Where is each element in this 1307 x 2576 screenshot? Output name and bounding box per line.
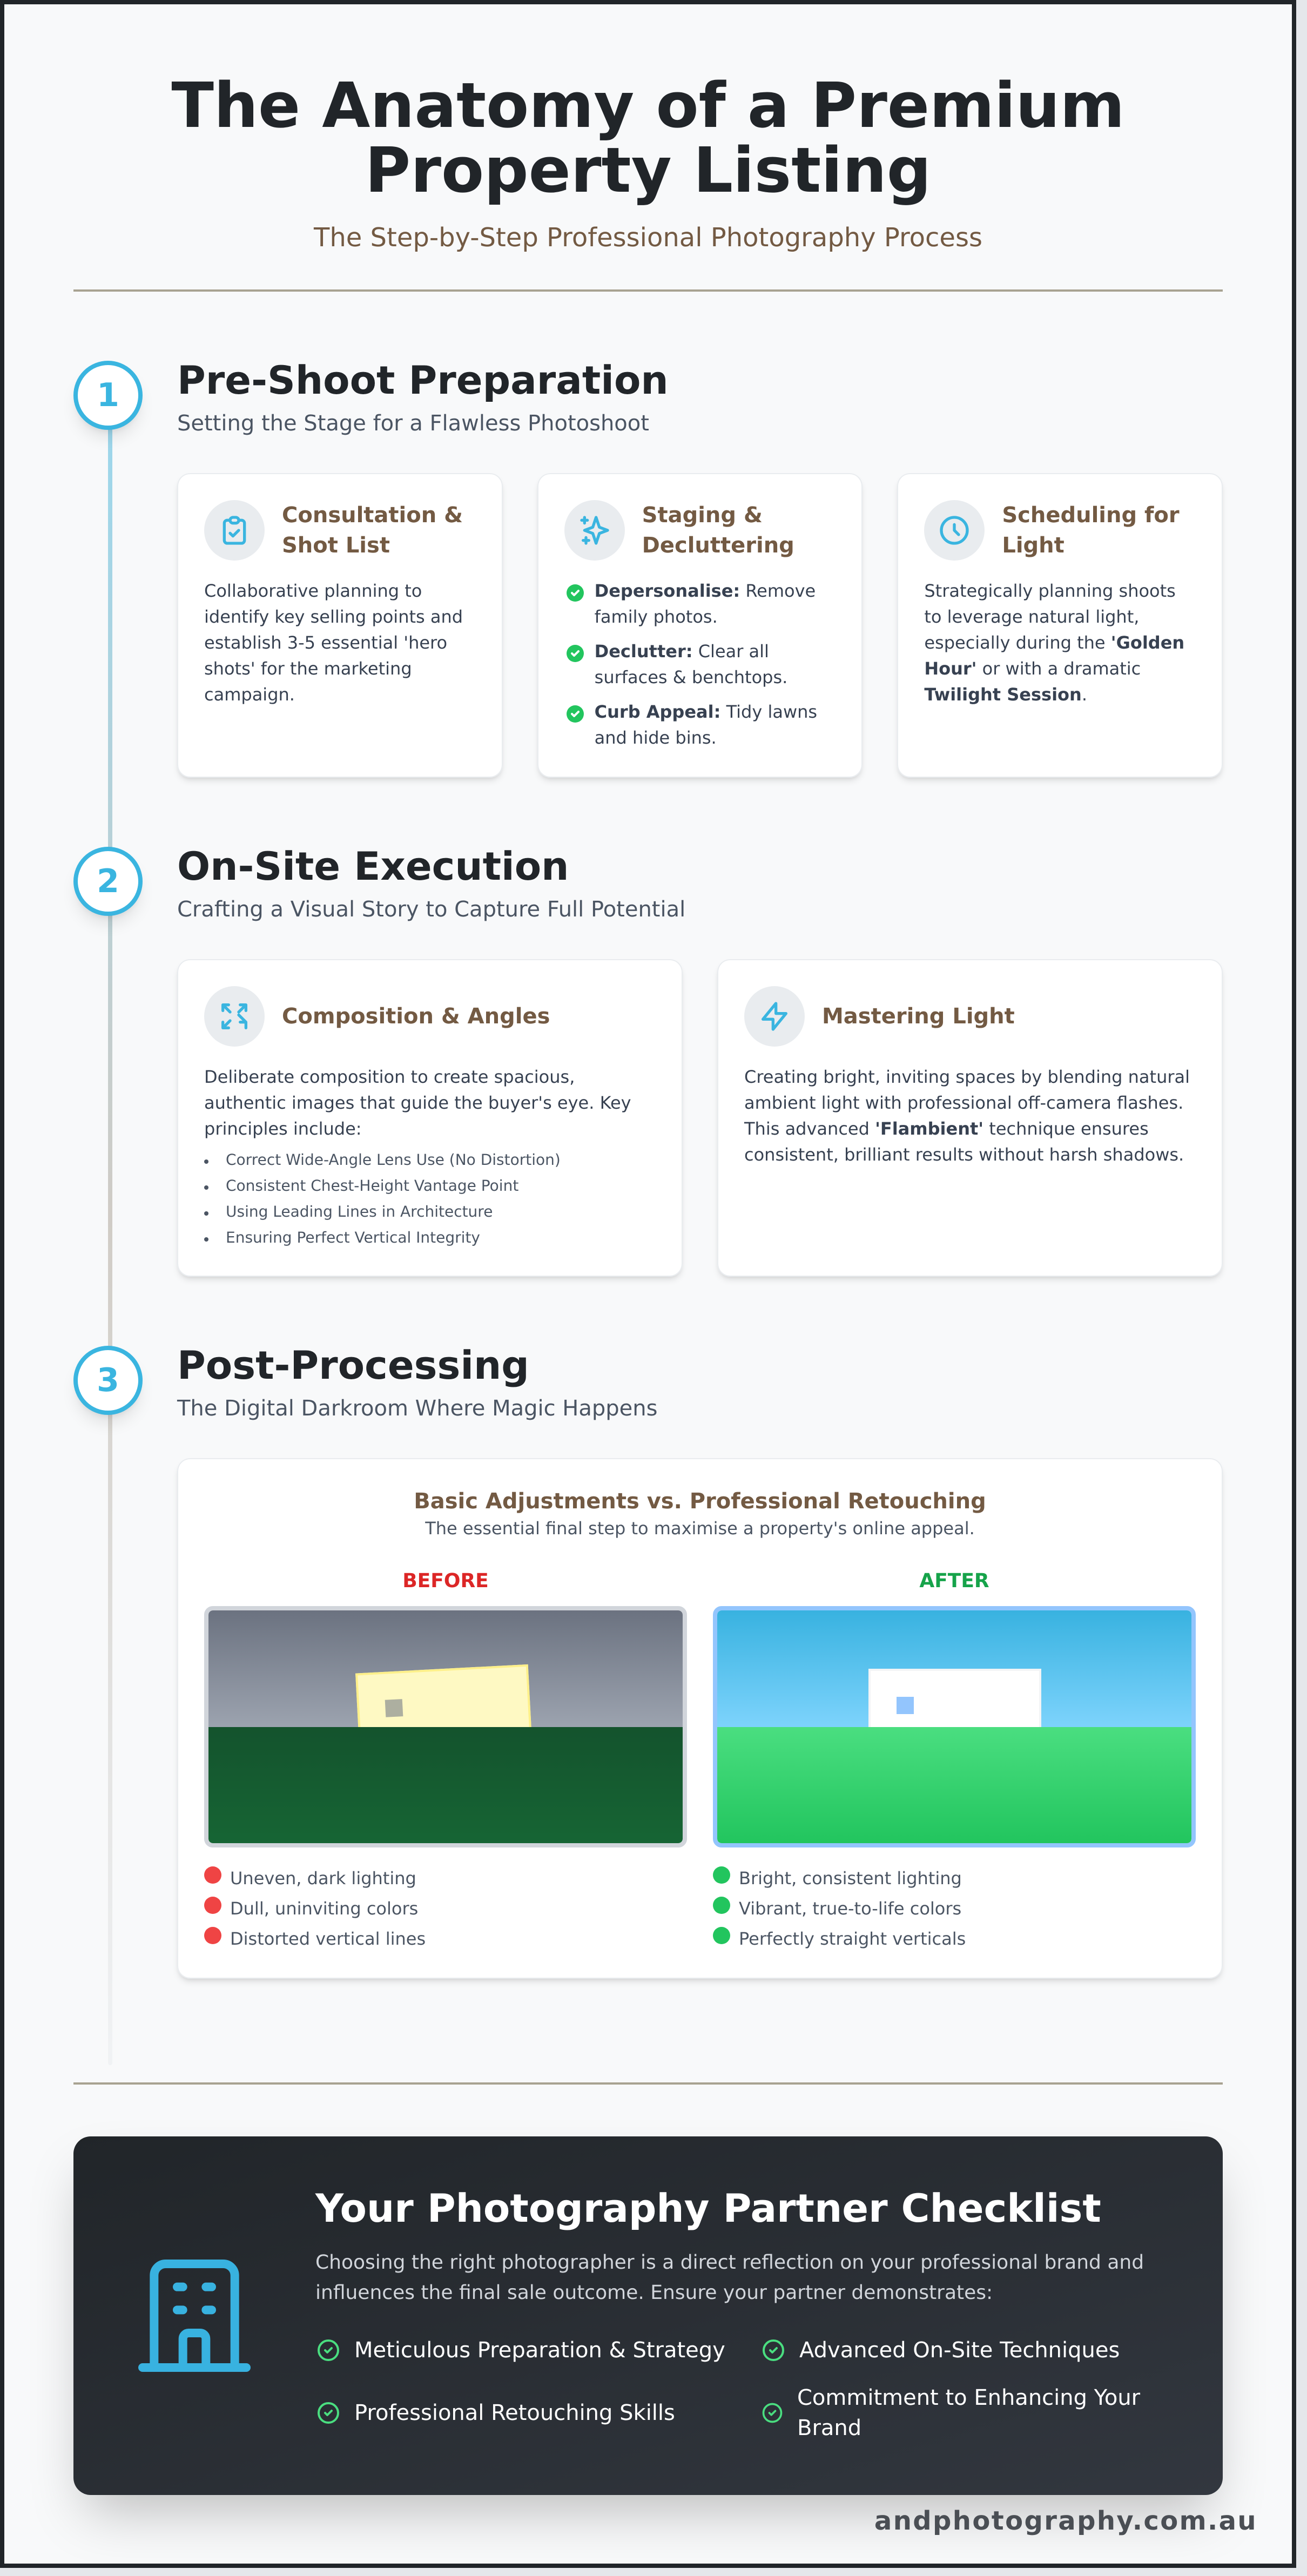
card title: Mastering Light bbox=[822, 1004, 1015, 1029]
list item: Declutter: surfaces & benchtops. bbox=[595, 667, 787, 687]
comparison title: Basic Adjustments vs. Professional Retouching bbox=[414, 1489, 986, 1514]
card title bbox=[1002, 503, 1180, 558]
card title: Shot List bbox=[282, 533, 390, 558]
list item: Declutter bbox=[595, 641, 787, 687]
after list: Perfectly straight verticals bbox=[739, 1928, 966, 1949]
checklist intro: Choosing the right photographer is a direct reflection on your professional brand and bbox=[315, 2251, 1144, 2274]
bullet list of principles: Using Leading Lines in Architecture bbox=[226, 1203, 493, 1220]
title bbox=[171, 70, 1125, 207]
card title: Scheduling for bbox=[1002, 503, 1180, 528]
card text bbox=[744, 1067, 1190, 1165]
card title: Composition & Angles bbox=[282, 1004, 550, 1029]
before list: Uneven, dark lighting bbox=[230, 1868, 416, 1889]
before label: BEFORE bbox=[402, 1570, 489, 1592]
card text: Twilight Session. bbox=[924, 684, 1087, 705]
card text: consistent, brilliant results without harsh shadows. bbox=[744, 1144, 1184, 1165]
icon: lightning bolt bbox=[744, 986, 805, 1047]
after list: Vibrant, true-to-life colors bbox=[739, 1898, 961, 1919]
after label: AFTER bbox=[919, 1570, 989, 1592]
list item: Declutter: Declutter: Clear all bbox=[595, 641, 769, 662]
list item: Curb Appeal: Curb Appeal: Tidy lawns bbox=[595, 702, 817, 722]
icon: sparkles bbox=[564, 500, 625, 561]
card title: Decluttering bbox=[642, 533, 794, 558]
checklist intro bbox=[315, 2251, 1144, 2304]
card title bbox=[282, 503, 463, 558]
card text: Collaborative planning to bbox=[204, 581, 422, 601]
card text: establish 3-5 essential 'hero bbox=[204, 632, 447, 653]
card text: ambient light with professional off-camera flashes. bbox=[744, 1093, 1183, 1113]
checklist item 4: Commitment to Enhancing Your bbox=[797, 2385, 1140, 2410]
check icon 2 bbox=[567, 645, 584, 662]
before image illustration bbox=[204, 1606, 687, 1847]
panel: Mastering Light bbox=[717, 959, 1223, 1277]
panel: Scheduling for Light bbox=[897, 473, 1223, 778]
bullet list of principles: Correct Wide-Angle Lens Use (No Distortion) bbox=[226, 1151, 561, 1169]
step number 3 bbox=[73, 1346, 143, 1415]
card text bbox=[204, 581, 463, 705]
icon: clipboard check bbox=[204, 500, 265, 561]
bullet list of principles: Ensuring Perfect Vertical Integrity bbox=[226, 1229, 480, 1246]
card text bbox=[204, 1067, 631, 1139]
before list bbox=[204, 1866, 426, 1949]
card title bbox=[642, 503, 794, 558]
title: The Anatomy of a Premium bbox=[171, 70, 1125, 142]
card text: Strategically planning shoots bbox=[924, 581, 1176, 601]
step number 2 bbox=[73, 847, 143, 916]
list item: Depersonalise: family photos. bbox=[595, 606, 718, 627]
panel: Consultation & Shot List bbox=[177, 473, 503, 778]
list item: Curb Appeal bbox=[595, 702, 817, 748]
checklist intro: influences the final sale outcome. Ensure your partner demonstrates: bbox=[315, 2282, 993, 2304]
panel: Composition & Angles bbox=[177, 959, 683, 1277]
lower divider bbox=[73, 2082, 1223, 2085]
bullet list of principles: Consistent Chest-Height Vantage Point bbox=[226, 1177, 518, 1195]
list item: Depersonalise: Depersonalise: Remove bbox=[595, 581, 816, 601]
section subheading 2: Crafting a Visual Story to Capture Full Potential bbox=[177, 897, 685, 922]
checklist item 1: Meticulous Preparation & Strategy bbox=[354, 2338, 725, 2363]
section heading: Post-Processing: Post-Processing bbox=[177, 1343, 529, 1388]
section heading: Pre-Shoot Preparation: Pre-Shoot Preparation bbox=[177, 358, 669, 403]
section subheading 3: The Digital Darkroom Where Magic Happens bbox=[177, 1396, 657, 1421]
before list: Distorted vertical lines bbox=[230, 1928, 426, 1949]
step number 3: 3 bbox=[97, 1361, 119, 1399]
checklist item 2: Advanced On-Site Techniques bbox=[799, 2338, 1120, 2363]
panel: Your Photography Partner Checklist bbox=[73, 2136, 1223, 2495]
section heading: On-Site Execution: On-Site Execution bbox=[177, 844, 569, 889]
panel: before and after comparison bbox=[177, 1458, 1223, 1979]
card text: identify key selling points and bbox=[204, 606, 463, 627]
checklist item 3: Professional Retouching Skills bbox=[354, 2400, 675, 2425]
after image illustration bbox=[713, 1606, 1196, 1847]
website footer: andphotography.com.au bbox=[874, 2506, 1257, 2536]
card text: shots' for the marketing bbox=[204, 658, 412, 679]
step number 1 bbox=[73, 361, 143, 430]
checklist item 4 bbox=[760, 2383, 1182, 2443]
card text: campaign. bbox=[204, 684, 295, 705]
section subheading 1: Setting the Stage for a Flawless Photoshoot bbox=[177, 411, 649, 436]
timeline line bbox=[108, 363, 112, 2065]
bullet list of principles bbox=[204, 1151, 561, 1246]
header divider bbox=[73, 289, 1223, 292]
card text: Creating bright, inviting spaces by blending natural bbox=[744, 1067, 1190, 1087]
card text: especially during the 'Golden bbox=[924, 632, 1184, 653]
card title: Staging & bbox=[642, 503, 763, 528]
icon: clock bbox=[924, 500, 985, 561]
card text: authentic images that guide the buyer's eye. Key bbox=[204, 1093, 631, 1113]
list item: Depersonalise bbox=[595, 581, 816, 627]
card title: Consultation & bbox=[282, 503, 463, 528]
title: Property Listing bbox=[365, 134, 931, 207]
card text bbox=[924, 581, 1184, 705]
subtitle: The Step-by-Step Professional Photography Process bbox=[314, 222, 982, 253]
step number 2: 2 bbox=[97, 862, 119, 900]
card text: Deliberate composition to create spacious, bbox=[204, 1067, 575, 1087]
check icon 3 bbox=[567, 705, 584, 723]
card text: This advanced 'Flambient' technique ensures bbox=[744, 1118, 1149, 1139]
icon: expanding arrows bbox=[204, 986, 265, 1047]
card text: to leverage natural light, bbox=[924, 606, 1139, 627]
checklist item 4: Brand bbox=[797, 2416, 861, 2440]
panel: Staging & Decluttering bbox=[537, 473, 863, 778]
card title: Light bbox=[1002, 533, 1065, 558]
check icon 1 bbox=[567, 584, 584, 602]
checklist heading: Your Photography Partner Checklist bbox=[315, 2186, 1101, 2231]
before list: Dull, uninviting colors bbox=[230, 1898, 418, 1919]
after list: Bright, consistent lighting bbox=[739, 1868, 962, 1889]
icon: office building bbox=[138, 2260, 251, 2372]
step number 1: 1 bbox=[97, 376, 119, 414]
card text: Hour' or with a dramatic bbox=[924, 658, 1141, 679]
comparison subtitle: The essential final step to maximise a property's online appeal. bbox=[425, 1518, 975, 1539]
list item: Curb Appeal: and hide bins. bbox=[595, 727, 717, 748]
card text: principles include: bbox=[204, 1118, 362, 1139]
after list bbox=[713, 1866, 966, 1949]
